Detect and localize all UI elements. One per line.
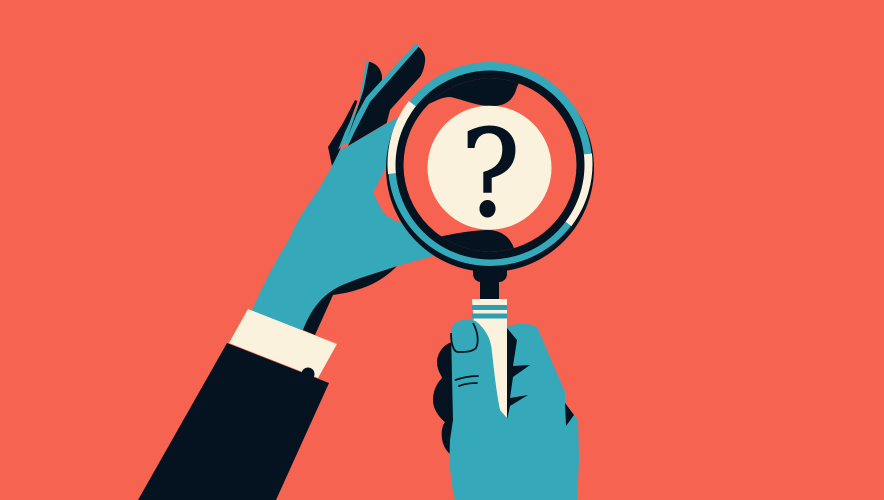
folded finger: back [328, 100, 358, 166]
cream rim highlights [392, 104, 588, 223]
handle stripe: upper [472, 305, 507, 310]
hand and wrist [248, 117, 440, 330]
teal edge: index finger [345, 44, 420, 144]
teal rim [388, 62, 592, 266]
cream handle [472, 299, 507, 418]
knuckles behind the thumb [433, 342, 460, 454]
bottom fingertip [441, 230, 514, 252]
blurred fingertips through the lens [428, 78, 519, 252]
handle stripe: lower [472, 314, 507, 318]
folded finger: middle [346, 62, 382, 142]
thumb and palm [450, 320, 520, 500]
suit sleeve [138, 343, 329, 500]
dark inner rim [396, 70, 584, 260]
right hand: gripping the handle [433, 299, 579, 500]
cream disc [428, 106, 552, 230]
top fingertip [428, 78, 519, 106]
shirt cuff [229, 309, 337, 378]
lens shadow [386, 64, 594, 272]
thumb wrinkles [456, 376, 478, 386]
teal edge: back finger [338, 62, 369, 150]
finger creases [507, 328, 530, 432]
illustration: hands holding a magnifying glass [138, 44, 594, 500]
handle collar [473, 266, 507, 282]
thumbnail [451, 323, 478, 352]
index finger [348, 47, 425, 146]
magnifying glass [386, 60, 594, 302]
cuff button [302, 368, 314, 380]
palm notch [565, 403, 574, 426]
left arm: shirt cuff and sleeve [138, 309, 337, 500]
handle stem [480, 262, 499, 302]
fingers [500, 324, 579, 500]
question mark: ? [461, 105, 520, 243]
lens glass [404, 78, 576, 252]
left hand: holding the lens [248, 44, 440, 335]
hand shadow [303, 266, 397, 335]
